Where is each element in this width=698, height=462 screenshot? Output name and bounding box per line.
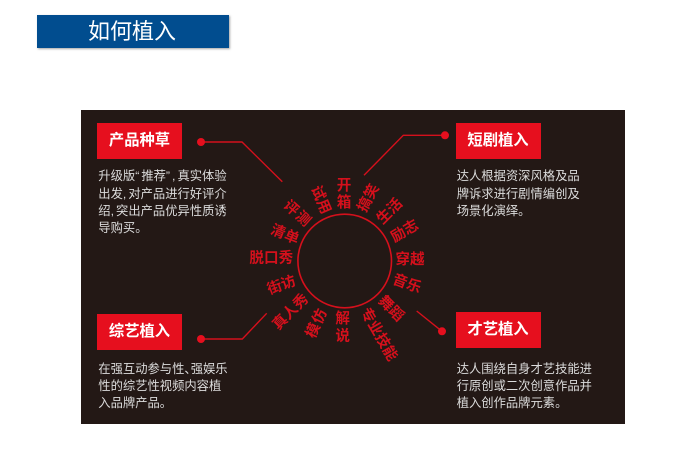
connector: bottom left bbox=[197, 313, 267, 343]
text: 产品种草 description bbox=[98, 169, 227, 235]
label: 清单: 清单 bbox=[268, 220, 302, 248]
label: 试用: 试用 bbox=[307, 183, 334, 217]
text: 才艺植入 description: 植入创作品牌元素。 bbox=[457, 396, 567, 410]
panel: dark background bbox=[81, 110, 625, 424]
tag: 短剧植入: 短剧植入 bbox=[467, 132, 529, 148]
label: 励志: 励志 bbox=[387, 216, 422, 246]
label: 脱口秀: 脱口秀 bbox=[249, 248, 294, 266]
text: 短剧植入 description: 场景化演绎。 bbox=[457, 204, 530, 218]
text: 产品种草 description: 导购买。 bbox=[98, 221, 148, 235]
text: 短剧植入 description: 牌诉求进行剧情编创及 bbox=[457, 187, 580, 201]
ring labels bbox=[249, 178, 425, 364]
label: 音乐: 音乐 bbox=[390, 270, 424, 297]
text: 综艺植入 description: 在强互动参与性、强娱乐 bbox=[98, 362, 228, 376]
text: 才艺植入 description: 达人围绕自身才艺技能进 bbox=[457, 362, 592, 376]
tag: 产品种草: 产品种草 bbox=[109, 132, 170, 148]
text: 产品种草 description: 升级版“推荐”,真实体验 bbox=[98, 169, 227, 183]
text: 产品种草 description: 绍,突出产品优异性质诱 bbox=[98, 204, 227, 218]
tag: 产品种草 bbox=[97, 122, 182, 158]
connector: top right bbox=[364, 131, 449, 175]
label: 开箱: 开 bbox=[337, 178, 351, 194]
title banner: 如何植入 bbox=[88, 19, 176, 44]
connector: top left bbox=[197, 138, 282, 182]
tag: 短剧植入 bbox=[456, 122, 540, 158]
text: 才艺植入 description: 行原创或二次创意作品并 bbox=[457, 379, 592, 393]
label: 舞蹈: 舞蹈 bbox=[375, 292, 408, 325]
text: 才艺植入 description bbox=[457, 362, 592, 410]
label: 街访: 街访 bbox=[265, 271, 299, 298]
tag: 综艺植入: 综艺植入 bbox=[109, 323, 170, 340]
label: 评测: 评测 bbox=[280, 197, 315, 231]
label: 真人秀: 真人秀 bbox=[268, 289, 312, 333]
text: 综艺植入 description: 性的综艺性视频内容植 bbox=[98, 379, 221, 393]
label: 开箱 bbox=[337, 178, 351, 211]
tag: 综艺植入 bbox=[97, 314, 182, 350]
text: 综艺植入 description bbox=[98, 362, 228, 410]
label: 解说: 说 bbox=[335, 328, 350, 345]
label: 解说 bbox=[335, 310, 350, 345]
label: 搞笑: 搞笑 bbox=[353, 180, 383, 215]
central ring bbox=[298, 214, 392, 308]
label: 开箱: 箱 bbox=[337, 193, 351, 211]
text: 产品种草 description: 出发,对产品进行好评介 bbox=[98, 187, 227, 201]
tag: 才艺植入: 才艺植入 bbox=[467, 321, 529, 338]
label: 生活: 生活 bbox=[373, 195, 406, 228]
label: 解说: 解 bbox=[335, 310, 350, 327]
tag: 才艺植入 bbox=[456, 312, 540, 348]
text: 短剧植入 description: 达人根据资深风格及品 bbox=[457, 169, 580, 183]
label: 专业技能: 专业技能 bbox=[357, 304, 402, 364]
text: 短剧植入 description bbox=[457, 169, 580, 218]
label: 模仿: 模仿 bbox=[302, 305, 331, 341]
connector: bottom right bbox=[417, 311, 446, 335]
text: 综艺植入 description: 入品牌产品。 bbox=[98, 396, 172, 410]
label: 穿越: 穿越 bbox=[395, 250, 425, 268]
title banner bbox=[37, 15, 229, 48]
